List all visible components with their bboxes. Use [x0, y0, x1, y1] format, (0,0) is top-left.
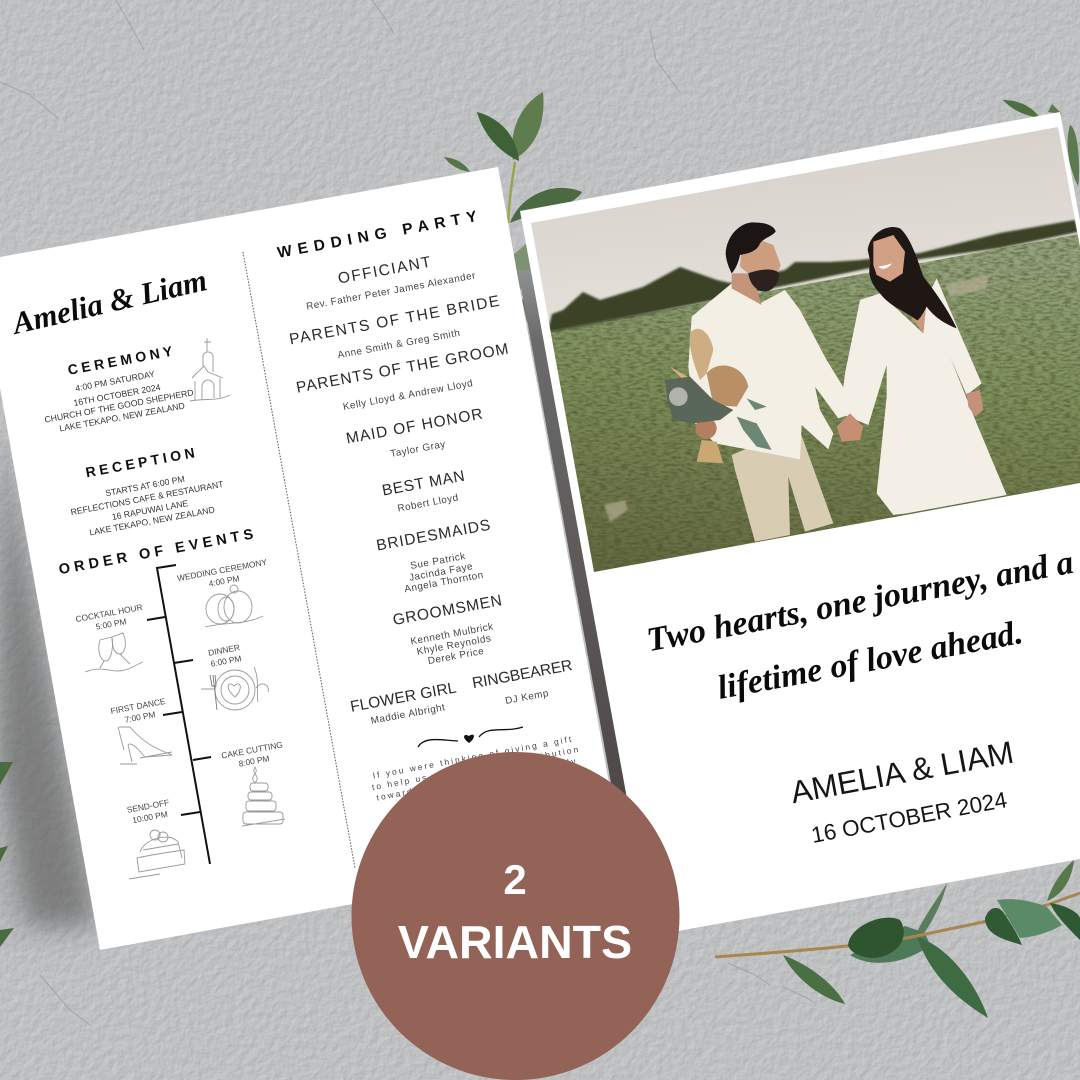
timeline labels: 5:00 PM	[95, 616, 127, 632]
wedding party column: PARENTS OF THE GROOM	[295, 340, 511, 397]
timeline labels: SEND-OFF	[126, 797, 170, 815]
timeline labels: WEDDING CEREMONY	[176, 557, 268, 583]
gift note: to help us on our way, a contribution	[371, 744, 581, 792]
reception details: STARTS AT 6:00 PM	[105, 474, 185, 498]
woman	[837, 227, 1007, 515]
leaves: bottom right sprig	[715, 860, 1080, 1018]
icon: champagne glasses	[85, 633, 143, 672]
reception details: 16 RAPUWAI LANE	[111, 498, 189, 522]
ceremony details: CHURCH OF THE GOOD SHEPHERD	[44, 387, 194, 425]
icon: tiered wedding cake	[242, 767, 285, 826]
icon: getaway car	[129, 830, 185, 879]
ceremony details	[44, 342, 194, 434]
reception details: LAKE TEKAPO, NEW ZEALAND	[89, 504, 215, 538]
quote script: lifetime of love ahead.	[714, 614, 1026, 707]
order of events heading: ORDER OF EVENTS	[58, 526, 259, 578]
wedding party column: PARENTS OF THE BRIDE	[288, 293, 502, 348]
bouquet	[665, 329, 772, 463]
quote script: Two hearts, one journey, and a	[644, 544, 1076, 659]
timeline labels: 6:00 PM	[210, 653, 242, 669]
wedding party column: Robert Lloyd	[397, 492, 460, 515]
icon: dinner plate with heart	[201, 667, 268, 710]
panel: left program card	[0, 167, 622, 950]
wedding date: 16 OCTOBER 2024	[809, 787, 1009, 848]
flourish with heart	[418, 727, 523, 747]
wedding party column: Angela Thornton	[404, 570, 485, 595]
ceremony details: 16TH OCTOBER 2024	[73, 382, 161, 408]
timeline labels: 10:00 PM	[131, 809, 169, 825]
ceremony details: CEREMONY	[66, 342, 177, 378]
badge: 2 variants	[352, 752, 680, 1080]
timeline labels: 7:00 PM	[124, 709, 156, 725]
wedding party column: Jacinda Faye	[408, 561, 474, 584]
timeline labels: 4:00 PM	[208, 573, 240, 589]
wedding party column: BRIDESMAIDS	[375, 516, 493, 555]
wedding party column: Maddie Albright	[370, 702, 446, 727]
wedding party column: WEDDING PARTY	[276, 207, 484, 262]
timeline	[147, 565, 211, 864]
ceremony details: 4:00 PM SATURDAY	[74, 369, 156, 393]
timeline labels	[75, 557, 284, 825]
timeline labels: CAKE CUTTING	[220, 739, 284, 761]
wedding party column: MAID OF HONOR	[345, 405, 485, 448]
couple names: AMELIA & LIAM	[788, 734, 1016, 810]
icon: church	[190, 338, 230, 401]
wedding party column: OFFICIANT	[337, 253, 433, 288]
timeline labels: FIRST DANCE	[110, 696, 167, 716]
gift note: If you were thinking of giving a gift	[372, 734, 574, 780]
photo: couple walking in a field	[520, 110, 1080, 590]
wedding party column: RINGBEARER	[471, 657, 575, 692]
wedding party column: Kelly Lloyd & Andrew Lloyd	[342, 378, 474, 413]
wedding party column: DJ Kemp	[504, 688, 550, 707]
badge: 2 variants: 2	[503, 856, 527, 903]
wedding party column: FLOWER GIRL	[349, 679, 459, 716]
leaves: left edge	[0, 762, 14, 947]
timeline labels: DINNER	[207, 642, 241, 658]
wedding party column: Khyle Reynolds	[416, 633, 492, 658]
icon: high heel shoe	[118, 727, 172, 764]
man	[688, 222, 858, 542]
reception details	[70, 444, 225, 538]
ceremony details: LAKE TEKAPO, NEW ZEALAND	[59, 400, 185, 434]
card shadow strip between the cards	[518, 270, 640, 860]
icon: wedding rings	[205, 585, 263, 627]
wedding party column: Taylor Gray	[390, 439, 447, 460]
wedding party column: Sue Patrick	[410, 551, 467, 572]
dotted column divider	[243, 252, 355, 868]
gift note: towards our future would be greatly	[376, 755, 578, 803]
wedding party column: Anne Smith & Greg Smith	[337, 328, 461, 361]
wedding party column: BEST MAN	[381, 467, 467, 500]
wedding party column: Derek Price	[427, 646, 485, 667]
timeline labels: 8:00 PM	[238, 753, 270, 769]
leaves: top sprig behind the cards	[444, 92, 582, 322]
reception details: REFLECTIONS CAFE & RESTAURANT	[70, 479, 225, 517]
timeline labels: COCKTAIL HOUR	[75, 602, 143, 624]
couple name script: Amelia & Liam	[7, 262, 210, 341]
wedding party column: Kenneth Mulbrick	[410, 621, 495, 648]
badge: 2 variants: VARIANTS	[398, 916, 632, 968]
wedding party column: GROOMSMEN	[391, 592, 505, 629]
leaves: top right sprig	[1003, 100, 1079, 186]
reception details: RECEPTION	[84, 444, 199, 480]
panel: right photo card	[520, 110, 1080, 936]
wedding party column: Rev. Father Peter James Alexander	[305, 270, 477, 313]
wedding party column	[276, 207, 575, 727]
couple figures, drawn in 3x crop coordinates	[665, 222, 1007, 542]
